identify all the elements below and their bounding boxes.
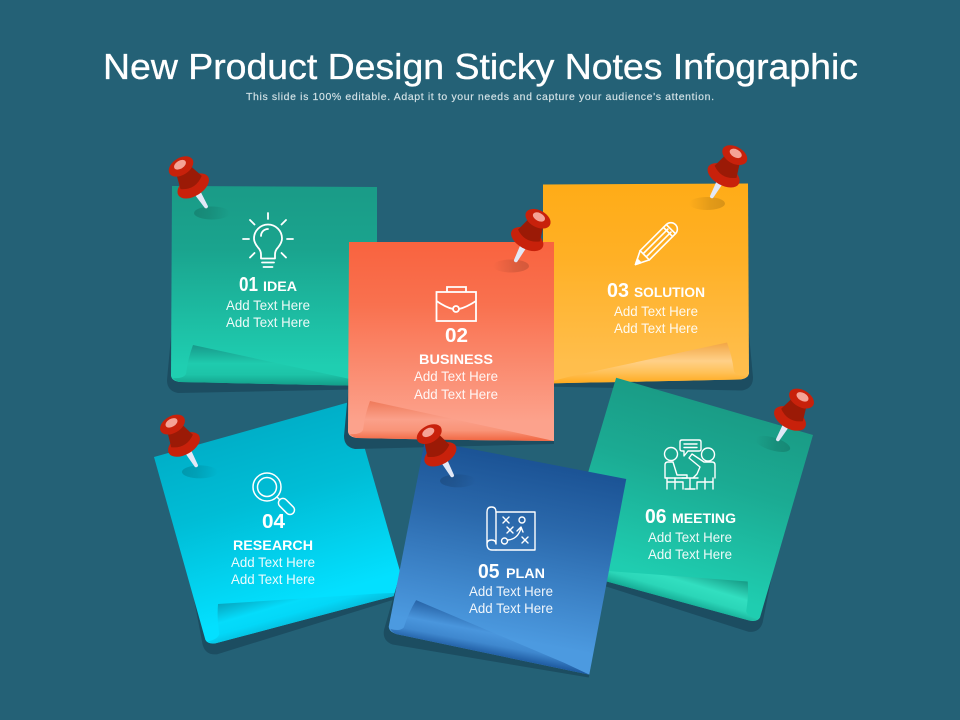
body text 04: Add Text Here bbox=[231, 571, 315, 587]
heading 01 idea: 01 bbox=[239, 274, 258, 296]
icon: pushpin 06 bbox=[762, 382, 821, 450]
heading 02 business: BUSINESS bbox=[419, 351, 493, 367]
body text 06: Add Text Here bbox=[648, 546, 732, 562]
body text 03: Add Text Here bbox=[614, 303, 698, 319]
heading 06 meeting: MEETING bbox=[672, 510, 736, 526]
icon: pushpin 05 bbox=[410, 418, 468, 486]
icon: light bulb bbox=[243, 213, 293, 267]
subtitle: This slide is 100% editable. Adapt it to your needs and capture your audience's attention. bbox=[246, 91, 714, 103]
heading 02 business bbox=[419, 325, 493, 367]
body text 03: Add Text Here bbox=[614, 320, 698, 336]
icon: pushpin 04 bbox=[153, 408, 212, 476]
icon: magnifier bbox=[247, 467, 303, 523]
heading 04 research: RESEARCH bbox=[233, 537, 313, 553]
heading 05 plan: 05 bbox=[478, 561, 500, 583]
icon: pushpin 03 bbox=[696, 139, 754, 207]
note paper 05 bbox=[382, 439, 626, 681]
heading 01 idea bbox=[239, 274, 297, 296]
panel: note 03 solution bbox=[543, 139, 754, 390]
panel: note 01 idea bbox=[162, 150, 377, 393]
note paper 01 bbox=[167, 186, 377, 393]
panel: note 05 plan bbox=[382, 418, 626, 681]
icon: pushpin 01 bbox=[162, 150, 222, 217]
title: New Product Design Sticky Notes Infographic bbox=[103, 46, 858, 87]
panel: note 04 research bbox=[149, 400, 408, 657]
body text 04 bbox=[231, 554, 315, 587]
heading 01 idea: IDEA bbox=[263, 278, 297, 294]
heading 06 meeting: 06 bbox=[645, 506, 666, 528]
heading 05 plan bbox=[478, 561, 545, 583]
note paper 02 bbox=[344, 242, 554, 449]
note paper 04 bbox=[149, 400, 408, 657]
panel: note 02 business bbox=[344, 203, 557, 449]
body text 02 bbox=[414, 368, 498, 402]
body text 01: Add Text Here bbox=[226, 297, 310, 313]
body text 02: Add Text Here bbox=[414, 386, 498, 402]
icon: pushpin 02 bbox=[500, 203, 557, 270]
heading 03 solution bbox=[607, 280, 705, 302]
heading 03 solution: SOLUTION bbox=[634, 284, 705, 300]
note paper 03 bbox=[543, 184, 753, 390]
icon: briefcase bbox=[436, 287, 476, 321]
panel: note 06 meeting bbox=[558, 377, 821, 635]
body text 05: Add Text Here bbox=[469, 600, 553, 616]
body text 02: Add Text Here bbox=[414, 368, 498, 384]
heading 04 research: 04 bbox=[262, 511, 286, 533]
body text 04: Add Text Here bbox=[231, 554, 315, 570]
body text 05 bbox=[469, 583, 553, 616]
body text 06: Add Text Here bbox=[648, 529, 732, 545]
heading 06 meeting bbox=[645, 506, 736, 528]
body text 03 bbox=[614, 303, 698, 336]
body text 01: Add Text Here bbox=[226, 314, 310, 330]
body text 05: Add Text Here bbox=[469, 583, 553, 599]
heading 03 solution: 03 bbox=[607, 280, 629, 302]
heading 02 business: 02 bbox=[445, 325, 468, 347]
body text 06 bbox=[648, 529, 732, 562]
icon: pencil bbox=[631, 220, 680, 269]
icon: meeting bbox=[664, 440, 715, 489]
note paper 06 bbox=[558, 377, 818, 635]
heading 04 research bbox=[233, 511, 313, 553]
heading 05 plan: PLAN bbox=[506, 565, 545, 581]
icon: strategy map bbox=[487, 507, 535, 550]
body text 01 bbox=[226, 297, 310, 330]
